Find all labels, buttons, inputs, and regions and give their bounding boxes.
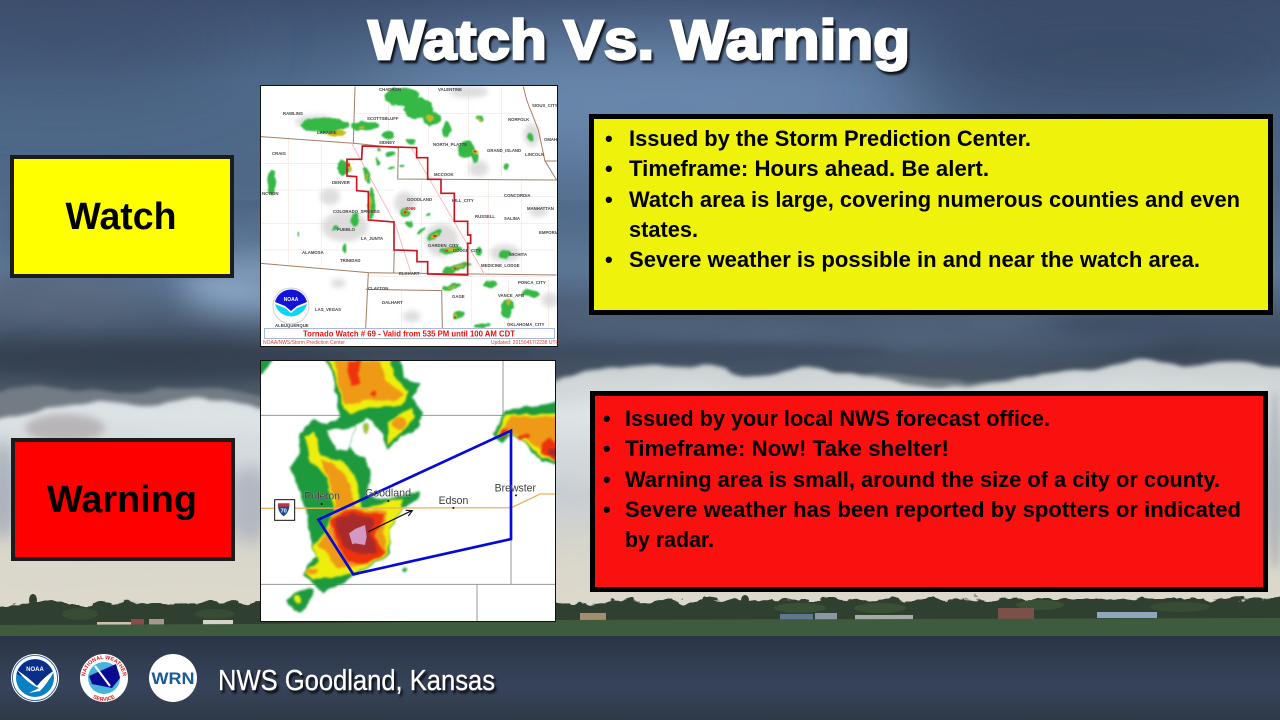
city labels: OMAHA	[544, 137, 560, 142]
NOAA logo on watch map: NOAA	[284, 297, 299, 303]
map caption bar: Tornado Watch # 69 - Valid from 535 PM until 100 AM CDT	[303, 330, 515, 338]
city labels: EMPORIA	[539, 230, 559, 235]
storm motion arrow	[368, 510, 412, 532]
white gaps in radar	[326, 424, 357, 452]
watch info panel	[592, 116, 1270, 312]
city labels: GOODLAND	[407, 197, 432, 202]
tornado watch map	[260, 86, 560, 346]
red echo cores	[348, 151, 476, 318]
city labels: MANHATTAN	[527, 206, 554, 211]
National Weather Service logo: SERVICE	[93, 694, 115, 702]
watch info panel: Severe weather is possible in and near the watch area.	[629, 247, 1200, 272]
interstate highway line	[261, 494, 556, 508]
city labels: RAWLINS	[283, 111, 303, 116]
town labels	[304, 482, 536, 509]
city labels: SIOUX_CITY	[532, 103, 558, 108]
map caption bar: NOAA/NWS/Storm Prediction Center	[263, 340, 345, 346]
red reflectivity	[330, 361, 558, 563]
city labels: VANCE_AFB	[498, 293, 524, 298]
city labels: DODGE_CITY	[453, 248, 481, 253]
title: Watch Vs. Warning	[368, 8, 910, 71]
watch label box	[12, 157, 232, 276]
city labels: PONCA_CITY	[518, 280, 546, 285]
green echoes	[267, 87, 538, 328]
city labels: PUEBLO	[337, 227, 356, 232]
grey radar clutter	[295, 86, 559, 323]
city labels: TRINIDAD	[340, 258, 361, 263]
watch info panel: states.	[629, 217, 698, 242]
warning info panel: •	[603, 467, 611, 492]
warning polygon	[318, 431, 511, 574]
background: green field	[0, 618, 1280, 637]
town labels: Goodland	[365, 487, 411, 499]
warning label box	[13, 440, 233, 559]
city labels: LAS_VEGAS	[315, 307, 341, 312]
city labels: 0069	[406, 206, 416, 211]
city labels: ALAMOSA	[302, 250, 324, 255]
watch info panel: •	[605, 247, 613, 272]
city labels: OKLAHOMA_CITY	[507, 322, 545, 327]
National Weather Service logo: NATIONAL WEATHER	[81, 655, 126, 676]
interstate 70 shield	[275, 500, 295, 520]
green reflectivity	[258, 358, 558, 612]
watch area outline	[347, 146, 471, 275]
state lines	[261, 87, 557, 328]
warning info panel: Issued by your local NWS forecast office.	[625, 406, 1050, 431]
pink hail core	[349, 525, 367, 545]
warning info panel: Severe weather has been reported by spotters or indicated	[625, 497, 1241, 522]
yellow reflectivity	[293, 358, 558, 604]
warning info panel	[592, 394, 1266, 590]
city labels: DALHART	[382, 300, 403, 305]
city labels: SCOTTSBLUFF	[367, 116, 399, 121]
city labels	[262, 87, 560, 328]
watch info panel: Timeframe: Hours ahead. Be alert.	[629, 156, 989, 181]
warning info panel: by radar.	[625, 527, 714, 552]
Weather-Ready Nation logo	[149, 654, 197, 702]
orange reflectivity	[306, 361, 558, 575]
warning info panel: •	[603, 497, 611, 522]
city labels: NCTION	[262, 191, 278, 196]
city labels: SALINA	[504, 216, 520, 221]
city labels: NORTH_PLATTE	[433, 142, 467, 147]
interstate 70 shield: 70	[281, 508, 287, 514]
city labels: ELKHART	[399, 271, 420, 276]
city labels: COLORADO_SPRINGS	[333, 209, 380, 214]
city labels: GARDEN_CITY	[428, 243, 459, 248]
watch info panel: •	[605, 156, 613, 181]
county lines	[261, 360, 556, 621]
city labels: GRAND_ISLAND	[487, 148, 521, 153]
city labels: NORFOLK	[508, 117, 530, 122]
office name: NWS Goodland, Kansas	[218, 665, 495, 697]
city labels: CRAIG	[272, 151, 287, 156]
city labels: CHADRON	[379, 87, 401, 92]
faint county lines	[262, 87, 555, 327]
city labels: MEDICINE_LODGE	[481, 263, 520, 268]
NOAA logo: NOAA	[26, 667, 44, 673]
city labels: HILL_CITY	[452, 198, 474, 203]
warning label box: Warning	[47, 479, 197, 521]
dark red core	[335, 448, 558, 555]
watch info panel: Issued by the Storm Prediction Center.	[629, 126, 1031, 151]
National Weather Service logo	[80, 654, 128, 702]
city labels: GAGE	[452, 294, 465, 299]
city labels: ALBUQUERQUE	[275, 323, 309, 328]
city labels: MCCOOK	[434, 172, 454, 177]
city labels: CLAYTON	[368, 286, 388, 291]
town labels: Edson	[439, 495, 468, 507]
pink watch diagonal	[352, 143, 485, 275]
watch info panel: •	[605, 126, 613, 151]
map caption bar: Updated: 20150417/2238 UTC	[491, 340, 559, 346]
town labels: Ruleton	[304, 491, 340, 503]
warning info panel: Timeframe: Now! Take shelter!	[625, 436, 949, 461]
NOAA logo on watch map	[273, 288, 309, 324]
warning info panel: •	[603, 406, 611, 431]
Weather-Ready Nation logo: WRN	[152, 669, 194, 688]
watch info panel: Watch area is large, covering numerous counties and even	[629, 187, 1240, 212]
background: tree line	[0, 594, 1280, 630]
city labels: VALENTINE	[438, 87, 462, 92]
map caption bar	[263, 328, 559, 346]
watch info panel: •	[605, 187, 613, 212]
warning info panel: Warning area is small, around the size of a city or county.	[625, 467, 1220, 492]
warning info panel: •	[603, 436, 611, 461]
city labels: DENVER	[332, 180, 351, 185]
city labels: SIDNEY	[379, 140, 395, 145]
yellow echo cores	[327, 114, 510, 319]
city labels: CONCORDIA	[504, 193, 530, 198]
city labels: RUSSELL	[475, 214, 495, 219]
watch label box: Watch	[66, 196, 176, 238]
background: farm buildings	[97, 608, 1157, 626]
town labels: Brewster	[495, 482, 536, 494]
city labels: LARAMIE	[317, 130, 337, 135]
city labels: LINCOLN	[525, 152, 544, 157]
NOAA logo	[11, 654, 59, 702]
city labels: WICHITA	[509, 252, 527, 257]
city labels: LA_JUNTA	[361, 236, 383, 241]
footer bar	[0, 636, 1280, 720]
severe warning radar map	[258, 358, 558, 622]
